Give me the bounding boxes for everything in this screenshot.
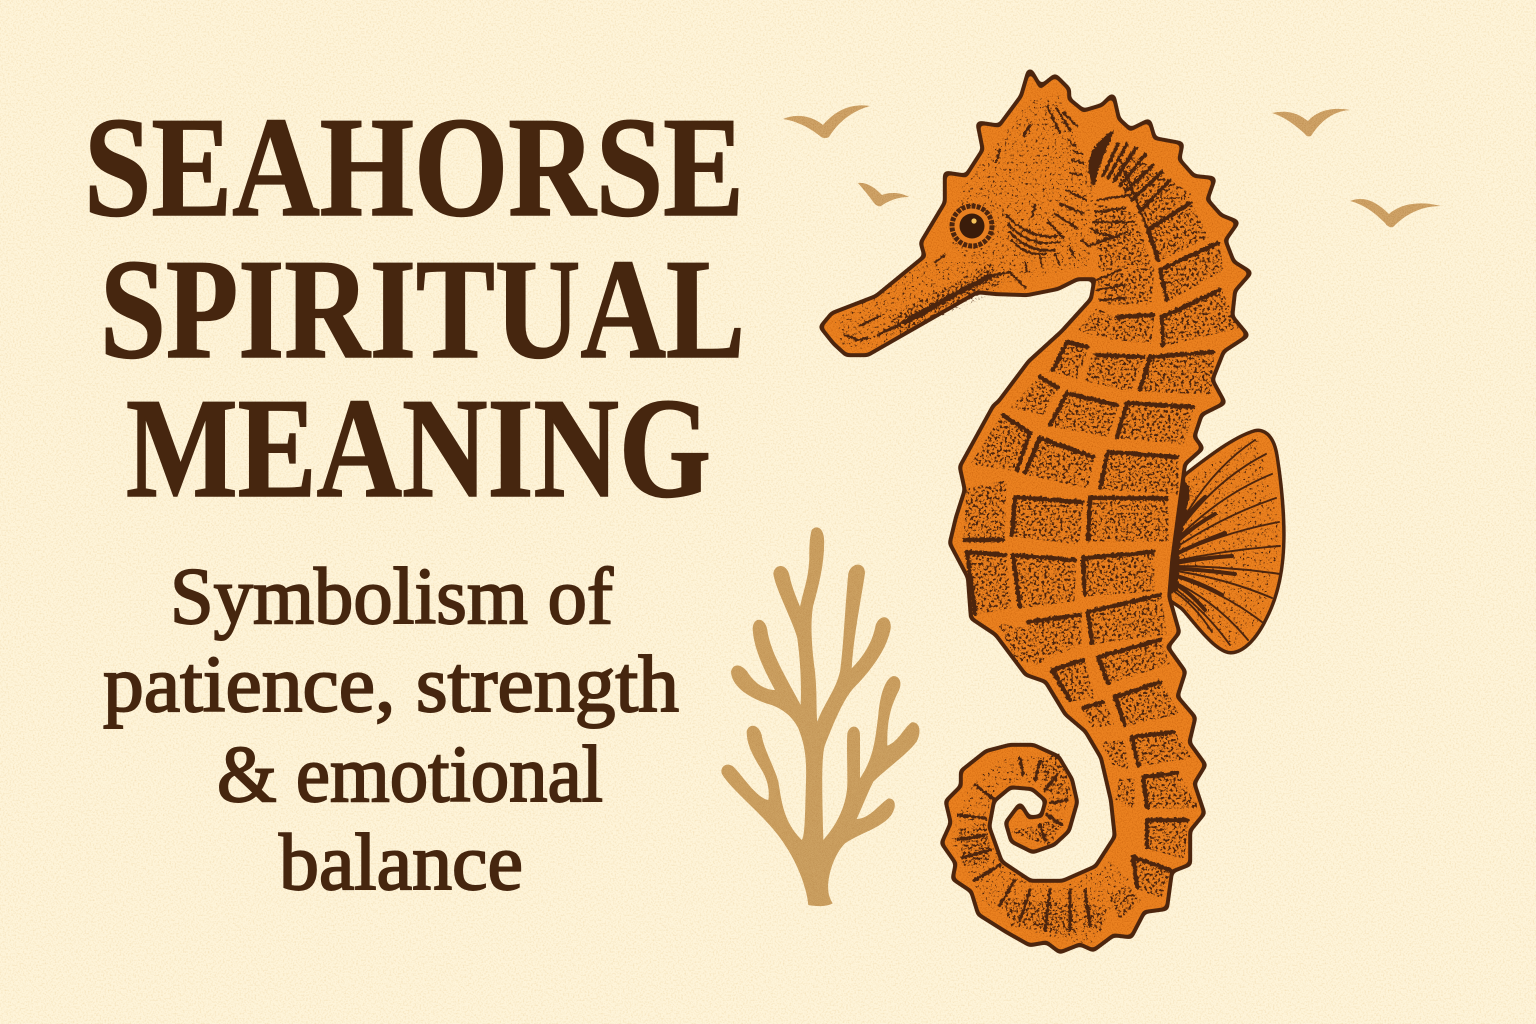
snout line <box>905 276 990 322</box>
crown hatching <box>996 106 1077 162</box>
illustration: seahorse <box>823 73 1282 950</box>
icon: eye <box>952 206 992 246</box>
icon: coral <box>721 527 919 906</box>
head and neck details <box>845 106 1170 340</box>
subtitle <box>103 553 679 907</box>
subtitle: Symbolism of <box>170 553 613 641</box>
operculum ring ticks <box>1025 140 1098 272</box>
subtitle: & emotional <box>217 731 603 819</box>
title <box>84 88 745 527</box>
tail segment ticks <box>958 758 1090 930</box>
subtitle: balance <box>279 819 523 907</box>
pectoral fin <box>1156 432 1282 651</box>
title: MEANING <box>126 369 711 527</box>
title: SPIRITUAL <box>100 230 745 388</box>
icon: birds <box>783 105 1441 227</box>
subtitle: patience, strength <box>103 641 679 729</box>
body plates speckle <box>890 155 1237 935</box>
neck ridges <box>1103 144 1170 212</box>
body fill <box>823 73 1248 950</box>
body outline <box>823 73 1248 950</box>
neck hatching <box>1088 160 1150 300</box>
cheek hatching <box>1006 190 1086 254</box>
title: SEAHORSE <box>84 88 744 246</box>
gill crescent <box>1089 130 1114 185</box>
plate edges <box>965 203 1220 887</box>
head and tail light speckle <box>835 95 1130 945</box>
